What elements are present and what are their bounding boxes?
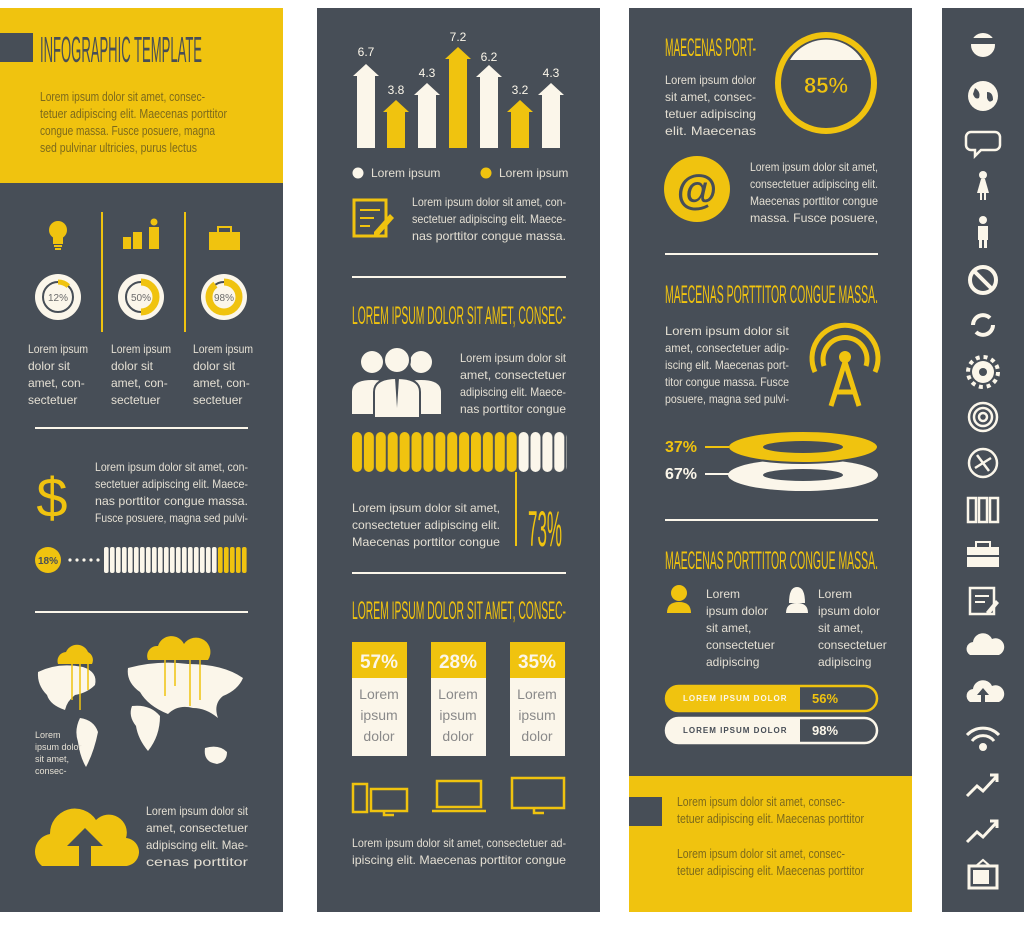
icon: briefcase [209, 227, 240, 250]
stat texts: dolor sit [28, 359, 71, 373]
bar chart arrows: 6.2 [481, 50, 498, 64]
intro text: Lorem ipsum dolor sit amet, consec- [40, 90, 205, 104]
cards: ipsum [360, 707, 398, 723]
footer yellow block: Lorem ipsum dolor sit amet, consec- [677, 847, 845, 861]
bar chart arrows: 4.3 [543, 66, 560, 80]
pill progress 73%: Maecenas porttitor congue [352, 535, 500, 549]
panel: column 3: Lorem ipsum dolor [665, 73, 756, 87]
bar 56% [666, 686, 877, 711]
panel: column 3: Lorem ipsum dolor sit amet, [750, 160, 878, 174]
bar chart arrows: 3.8 [388, 83, 405, 97]
world map: ipsum dolor [35, 742, 82, 752]
icon: speech bubble [966, 132, 1000, 156]
cards: ipsum [518, 707, 556, 723]
ring chart [665, 431, 878, 491]
stat texts: Lorem ipsum [111, 342, 171, 356]
icon: compass [969, 449, 997, 477]
intro text [40, 90, 227, 155]
intro text: sed pulvinar ultricies, purus lectus [40, 141, 197, 155]
panel: column 3: adipiscing [706, 655, 759, 669]
donut 50%: 50% [131, 293, 151, 304]
stat texts: sectetuer [193, 393, 242, 407]
text: LOREM IPSUM DOLOR SIT AMET, CONSEC- [352, 302, 566, 330]
icons: devices [353, 778, 564, 815]
intro text: tetuer adipiscing elit. Maecenas porttitor [40, 107, 227, 121]
cards: Lorem [517, 686, 557, 702]
panel: column 2: Lorem ipsum dolor sit amet, con- [412, 195, 566, 209]
cards: 28% [439, 652, 477, 673]
icon: woman [977, 171, 989, 200]
legend: Lorem ipsum [371, 166, 440, 180]
text: LOREM IPSUM DOLOR SIT AMET, CONSEC- [352, 597, 566, 625]
icon: bulb [49, 221, 67, 250]
stat texts: dolor sit [193, 359, 236, 373]
icon: cloud [967, 633, 1004, 655]
panel: column 3: MAECENAS PORT- [665, 34, 756, 62]
world map: sit amet, [35, 754, 69, 764]
footer yellow block: Lorem ipsum dolor sit amet, consec- [677, 795, 845, 809]
cards: ipsum [439, 707, 477, 723]
header block: INFOGRAPHIC TEMPLATE [40, 29, 202, 70]
stat texts [28, 342, 253, 407]
donut 98% [201, 274, 247, 320]
icon: trend arrow [967, 821, 997, 842]
panel: column 3: amet, consectetuer adip- [665, 341, 789, 355]
legend [352, 166, 568, 180]
stat columns [28, 212, 253, 407]
donut 98%: 98% [214, 293, 234, 304]
panel: column 3: iscing elit. Maecenas port- [665, 358, 789, 372]
panel: column 3: Lorem [818, 587, 852, 601]
stat texts: amet, con- [111, 376, 168, 390]
panel: column 2: amet, consectetuer [460, 368, 566, 382]
donut 12% [35, 274, 81, 320]
panel: column 3: Maecenas porttitor congue [750, 194, 878, 208]
icon: at sign [664, 156, 730, 222]
cards [352, 642, 565, 756]
icon: at sign: @ [677, 166, 717, 213]
pill progress 73% [352, 432, 567, 557]
icon: man [978, 216, 988, 248]
world map [35, 636, 243, 776]
panel: column 3: ipsum dolor [706, 604, 768, 618]
bar chart arrows: 6.7 [358, 45, 375, 59]
dollar block: Fusce posuere, magna sed pulvi- [95, 511, 248, 525]
gauge 85%: 85% [804, 73, 848, 98]
ring chart: 37% [665, 439, 697, 456]
donut 50% [118, 274, 164, 320]
panel: column 3: massa. Fusce posuere, [750, 211, 878, 225]
panel: column 1 [0, 8, 283, 912]
panel: column 3: consectetuer [818, 638, 887, 652]
legend: Lorem ipsum [499, 166, 568, 180]
icon: people [352, 347, 441, 418]
bar 98% [666, 718, 877, 743]
stat texts: amet, con- [193, 376, 250, 390]
bar 98%: LOREM IPSUM DOLOR [683, 726, 788, 735]
panel: column 3: Lorem [706, 587, 740, 601]
panel: icon sidebar [942, 8, 1024, 912]
intro text: congue massa. Fusce posuere, magna [40, 124, 215, 138]
icon: gear [968, 357, 998, 387]
cloud upload: Lorem ipsum dolor sit [146, 804, 249, 818]
stat texts: sectetuer [28, 393, 77, 407]
panel: column 2 [317, 8, 600, 912]
world map: Lorem [35, 730, 61, 740]
icon: tv [969, 860, 997, 888]
panel: column 2: nas porttitor congue massa. [412, 229, 566, 243]
panel: column 2: adipiscing elit. Maece- [460, 385, 566, 399]
cards: 57% [360, 652, 398, 673]
cloud upload: cenas porttitor [146, 855, 248, 869]
icon: female [786, 587, 808, 613]
icon: cloud [35, 809, 139, 866]
icon: target [969, 403, 997, 431]
donut 12%: 12% [48, 293, 68, 304]
cloud upload: amet, consectetuer [146, 821, 248, 835]
ring chart: 67% [665, 466, 697, 483]
cards: Lorem [359, 686, 399, 702]
cloud upload: adipiscing elit. Mae- [146, 838, 248, 852]
progress 18% [35, 547, 248, 573]
panel: column 3: tetuer adipiscing [665, 107, 756, 121]
panel: column 3 [629, 8, 912, 912]
icon: chart person [123, 218, 159, 249]
cards: dolor [442, 728, 474, 744]
icon: document [354, 200, 394, 236]
icon: wifi [967, 728, 999, 750]
stat texts: Lorem ipsum [193, 342, 253, 356]
bar chart arrows: 7.2 [450, 30, 467, 44]
panel: column 3: sit amet, [706, 621, 751, 635]
panel: column 3: Lorem ipsum dolor sit [665, 324, 790, 338]
panel: column 3: adipiscing [818, 655, 871, 669]
panel: column 2: ipiscing elit. Maecenas porttitor congue [352, 853, 566, 867]
panel: column 3: consectetuer adipiscing elit. [750, 177, 878, 191]
icon: refresh [973, 315, 993, 335]
panel: column 3: sit amet, consec- [665, 90, 756, 104]
cards: Lorem [438, 686, 478, 702]
icon: antenna [812, 325, 878, 406]
icon: male [667, 585, 691, 613]
world map: consec- [35, 766, 67, 776]
bar chart arrows [353, 30, 564, 148]
panel: column 2: Lorem ipsum dolor sit amet, consectetuer ad- [352, 836, 566, 850]
bar chart arrows: 4.3 [419, 66, 436, 80]
bar 98%: 98% [812, 723, 838, 738]
panel: column 3: elit. Maecenas [665, 124, 756, 138]
panel: column 2: 73% [528, 501, 562, 557]
icon: dollar: $ [36, 466, 68, 529]
panel: column 3: ipsum dolor [818, 604, 880, 618]
cloud upload [35, 804, 249, 869]
icon: head [971, 33, 995, 57]
pill progress 73%: Lorem ipsum dolor sit amet, [352, 501, 500, 515]
cards: dolor [363, 728, 395, 744]
panel: column 2: sectetuer adipiscing elit. Maece- [412, 212, 566, 226]
icon: no sign [970, 267, 996, 293]
dollar block: nas porttitor congue massa. [95, 494, 248, 508]
panel: column 2: Lorem ipsum dolor sit [460, 351, 567, 365]
icon: binders [968, 498, 998, 522]
panel: column 2: nas porttitor congue [460, 402, 566, 416]
dollar block: Lorem ipsum dolor sit amet, con- [95, 460, 248, 474]
bar chart arrows: 3.2 [512, 83, 529, 97]
progress 18%: 18% [38, 556, 58, 567]
icon: document [970, 588, 999, 615]
stat texts: Lorem ipsum [28, 342, 88, 356]
stat texts: dolor sit [111, 359, 154, 373]
bar 56%: LOREM IPSUM DOLOR [683, 694, 788, 703]
dollar block: sectetuer adipiscing elit. Maece- [95, 477, 248, 491]
cards: 35% [518, 652, 556, 673]
header block [0, 8, 283, 183]
icon: globe [968, 81, 998, 111]
dollar block [36, 460, 248, 529]
cards: dolor [521, 728, 553, 744]
icon: trend line [967, 775, 997, 796]
stat texts: sectetuer [111, 393, 160, 407]
icon: briefcase [967, 542, 999, 567]
panel: column 3: consectetuer [706, 638, 775, 652]
panel: column 3: sit amet, [818, 621, 863, 635]
panel: column 3: posuere, magna sed pulvi- [665, 392, 789, 406]
pins [72, 656, 200, 710]
footer yellow block: tetuer adipiscing elit. Maecenas porttitor [677, 812, 864, 826]
footer yellow block [629, 776, 912, 912]
footer yellow block: tetuer adipiscing elit. Maecenas porttitor [677, 864, 864, 878]
pill progress 73%: consectetuer adipiscing elit. [352, 518, 500, 532]
panel: column 3: titor congue massa. Fusce [665, 375, 789, 389]
icon: cloud upload [967, 680, 1004, 702]
stat texts: amet, con- [28, 376, 85, 390]
gauge 85% [778, 35, 874, 131]
bar 56%: 56% [812, 691, 838, 706]
